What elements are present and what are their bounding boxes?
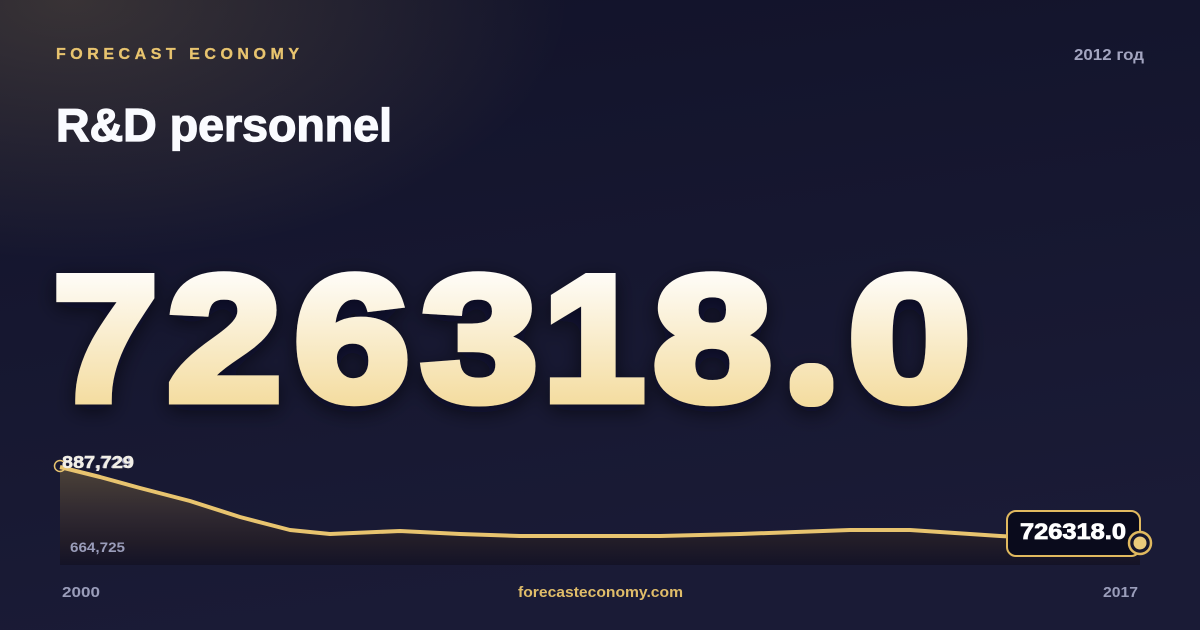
end year: 2017 — [1103, 584, 1138, 601]
year label: 2012 год — [1074, 47, 1144, 64]
title: R&D personnel — [56, 99, 392, 151]
area fill — [60, 467, 1140, 565]
big value: 1 — [543, 239, 645, 438]
big value: 7 — [53, 239, 158, 438]
minimum label: 664,725 — [70, 539, 125, 555]
trend line — [60, 467, 1140, 543]
value callout: 726318.0 — [1020, 519, 1126, 544]
brand label: FORECAST ECONOMY — [56, 46, 299, 63]
big value: 2 — [167, 238, 282, 438]
big value — [53, 238, 971, 439]
start marker — [54, 460, 66, 472]
value callout — [1007, 511, 1140, 556]
source url: forecasteconomy.com — [518, 584, 683, 601]
sparkline chart — [54, 452, 1151, 565]
big value: 6 — [294, 240, 410, 439]
secondary overlapped label: 887,729 — [62, 455, 132, 472]
big value: . — [806, 353, 817, 397]
start year: 2000 — [62, 584, 100, 601]
maximum label: 887,729 — [62, 452, 134, 472]
big value: 0 — [848, 239, 971, 438]
big value: 8 — [653, 239, 772, 438]
big value: 3 — [421, 240, 538, 438]
end marker — [1129, 532, 1151, 554]
